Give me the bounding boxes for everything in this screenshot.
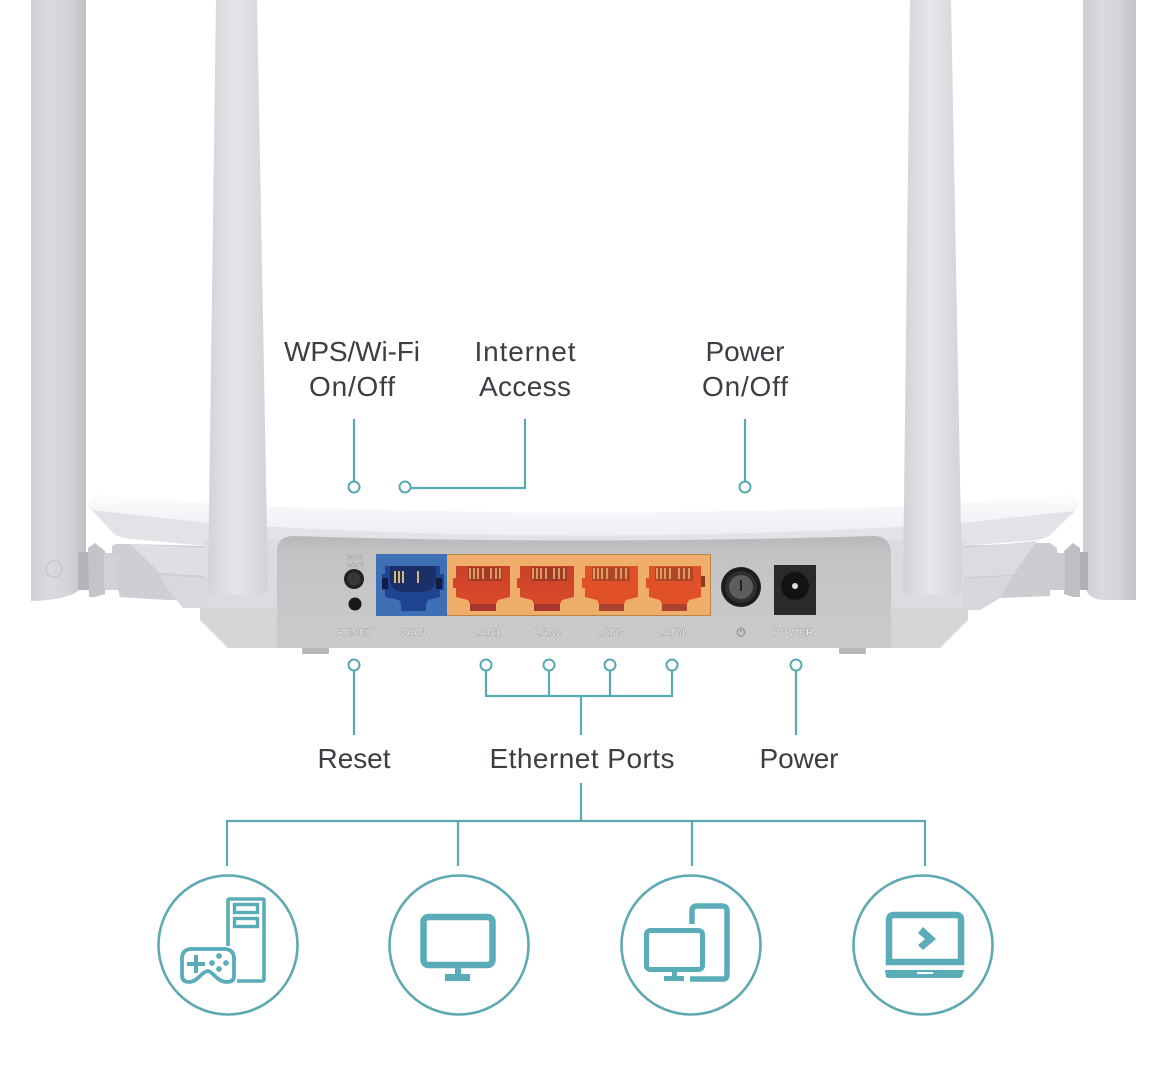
rear panel [277,536,891,648]
LAN 3 [582,566,638,611]
port captions: ⏻ [737,626,746,639]
label: Power On/Off: On/Off [702,371,788,402]
label: Power: Power [760,743,838,774]
label: Internet Access: Internet [474,336,576,367]
antenna: inner left [208,0,268,595]
reset hole [348,598,362,610]
port captions: WPS [347,555,363,562]
icon: desktop monitor [390,876,528,1014]
label: Reset: Reset [318,743,391,774]
port captions: RESET [337,627,374,639]
antenna: far right [1083,0,1136,600]
leader: Ethernet bracket [480,660,678,735]
label: WPS/Wi-Fi On/Off: WPS/Wi-Fi [284,336,420,367]
LAN 2 [517,566,574,611]
leader: Power switch [740,419,750,492]
port captions: POWER [772,627,814,639]
port captions: LAN4 [657,627,686,639]
label: WPS/Wi-Fi On/Off: On/Off [309,371,395,402]
port captions: Wi-Fi [346,563,364,570]
power switch [721,567,761,607]
label: Internet Access: Access [479,371,571,402]
port captions: LAN3 [596,627,624,639]
side shelves [130,540,1037,610]
icon: game console and controller [158,876,298,1014]
icon: laptop with play symbol [854,876,992,1014]
LAN ports [447,554,711,616]
WAN port [376,554,447,616]
label: Ethernet Ports: Ethernet Ports [490,743,674,774]
router body [78,495,1088,654]
label: Power On/Off: Power [706,336,784,367]
port captions: WAN [400,627,426,639]
device tree connector [227,783,925,866]
icon: monitor and tablet [622,876,760,1014]
leader: Power [790,660,802,735]
port captions: LAN1 [473,627,501,639]
antenna: inner right [903,0,962,595]
LAN 4 [646,566,705,611]
right hinge [960,543,1088,598]
leader: Reset [348,660,360,735]
base [200,608,968,648]
leader: WPS [348,419,360,492]
leader: Internet [400,419,525,492]
underside shell [92,510,1075,546]
port captions: LAN2 [534,627,562,639]
top white surface [88,495,1079,536]
LAN 1 [453,566,510,611]
WPS button [344,569,364,589]
left hinge [78,543,208,600]
port captions [337,555,814,639]
rubber feet [302,648,866,654]
power jack [774,565,816,615]
antenna: far left [31,0,86,601]
